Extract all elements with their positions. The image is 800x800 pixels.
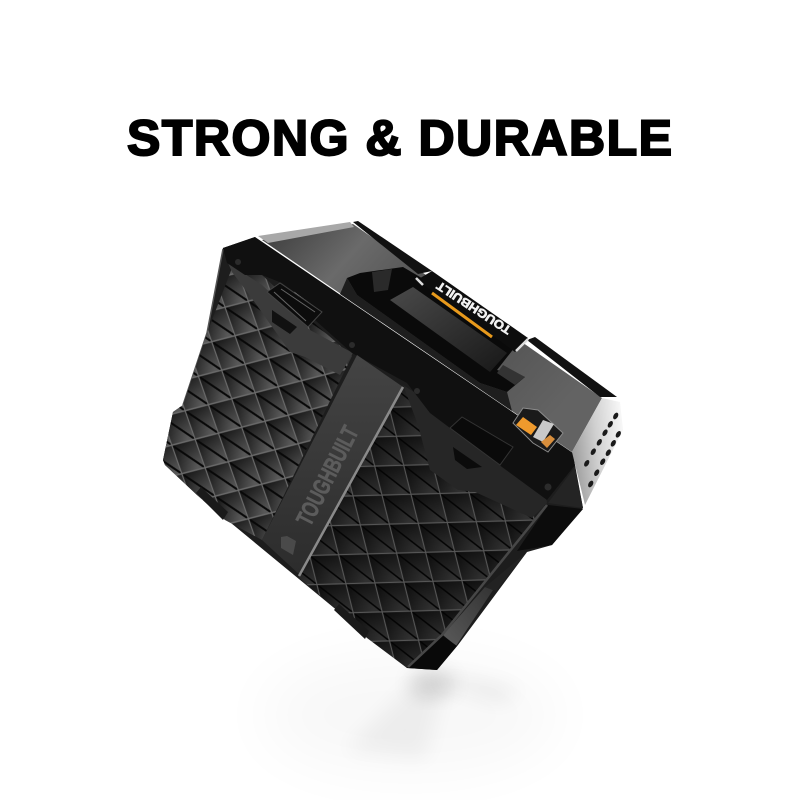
left clips (196, 487, 369, 639)
grey rail right (403, 385, 547, 518)
strap logo: TOUGHBUILT (291, 422, 365, 530)
end plate holes (583, 412, 622, 488)
orange latch (513, 408, 563, 452)
grey rail left (228, 263, 353, 375)
title: STRONG & DURABLE (127, 110, 672, 166)
band bolts (235, 259, 552, 490)
toolbox (163, 221, 623, 670)
handle (416, 271, 528, 352)
left latch (267, 283, 322, 334)
dark strip under recess (340, 278, 512, 411)
silver strip (258, 222, 354, 243)
black band (223, 237, 575, 500)
grid panel left (163, 268, 352, 540)
handle recess (347, 267, 525, 392)
toolbox legs and dark underside (163, 237, 583, 670)
handle logo: TOUGHBUILT (433, 278, 514, 337)
strap light edge (299, 387, 403, 576)
top face (262, 224, 602, 452)
end plate (572, 398, 623, 505)
strap emblem (281, 536, 296, 555)
dark rim (353, 221, 617, 397)
right latch (450, 417, 513, 469)
strap (262, 355, 403, 575)
orange stripe (432, 293, 492, 337)
right rim (408, 505, 547, 667)
grid panel right (298, 388, 547, 668)
floor shadow (260, 655, 560, 775)
